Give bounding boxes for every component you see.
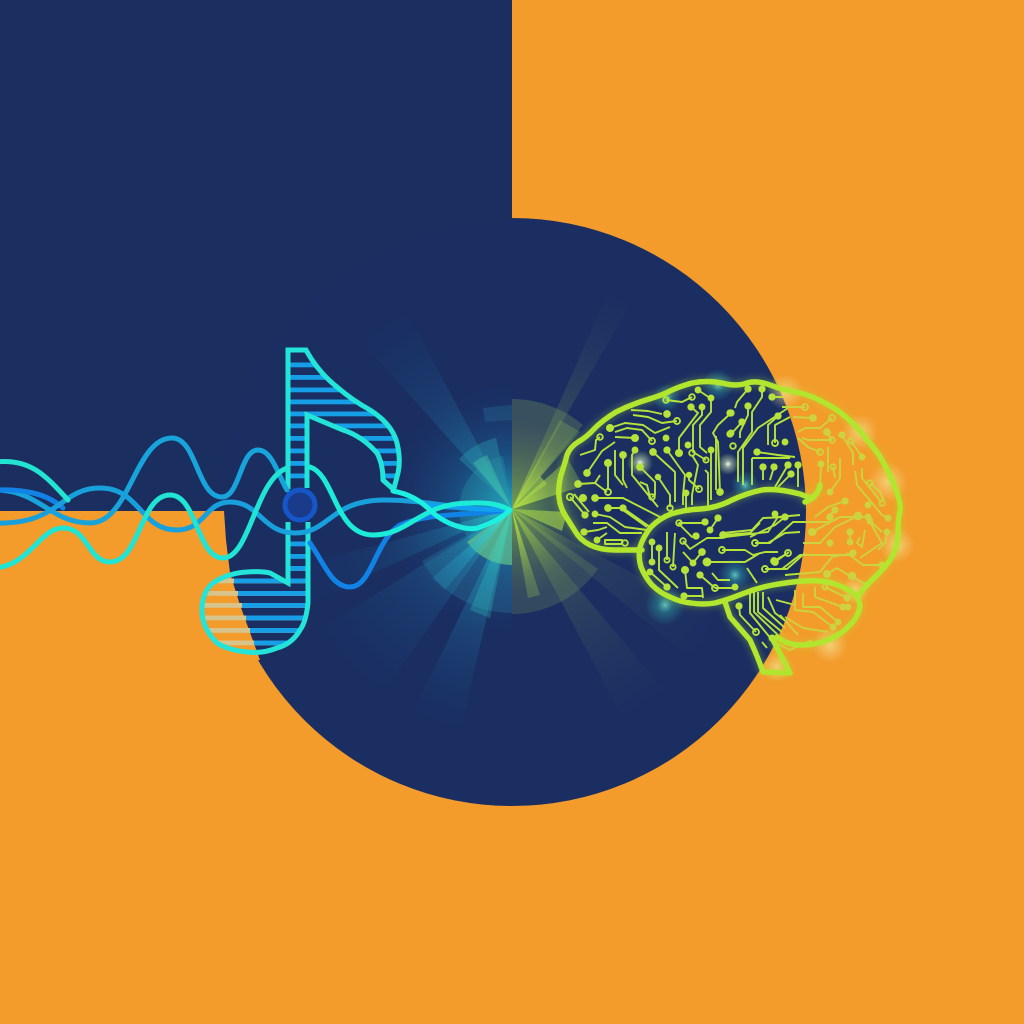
brain glow halos <box>627 369 915 682</box>
note stripes: flag and stem <box>290 362 397 478</box>
orange edge: lower left of circle <box>205 511 260 660</box>
illustration: music wave flowing into circuit brain <box>0 0 913 806</box>
wave: teal flag tail <box>393 491 510 529</box>
wave: blue through the note <box>0 488 510 533</box>
navy block: upper left <box>0 0 512 511</box>
note stripes: head on orange <box>204 570 306 646</box>
wave: bright blue start <box>0 490 63 508</box>
brain outline glow <box>559 382 900 673</box>
ring on the stem <box>285 490 315 520</box>
brain <box>559 369 915 682</box>
brain outline <box>559 382 900 673</box>
sound waves <box>0 438 510 587</box>
wave: teal lower left <box>0 468 287 568</box>
brain circuits on navy <box>566 386 806 649</box>
wave: lower bright blue <box>310 510 510 587</box>
brain circuits on orange <box>778 396 892 651</box>
note stripes: stem and head on navy <box>234 542 306 646</box>
note outline <box>202 350 399 652</box>
navy circle <box>218 218 806 806</box>
wave: teal right of stem <box>310 467 510 535</box>
radial burst: teal half <box>362 366 512 682</box>
wave: blue core into center <box>430 506 510 510</box>
wave: teal top left <box>0 461 68 500</box>
radial burst: green half <box>512 342 643 664</box>
music note <box>198 350 405 652</box>
wave: light blue <box>0 438 287 523</box>
